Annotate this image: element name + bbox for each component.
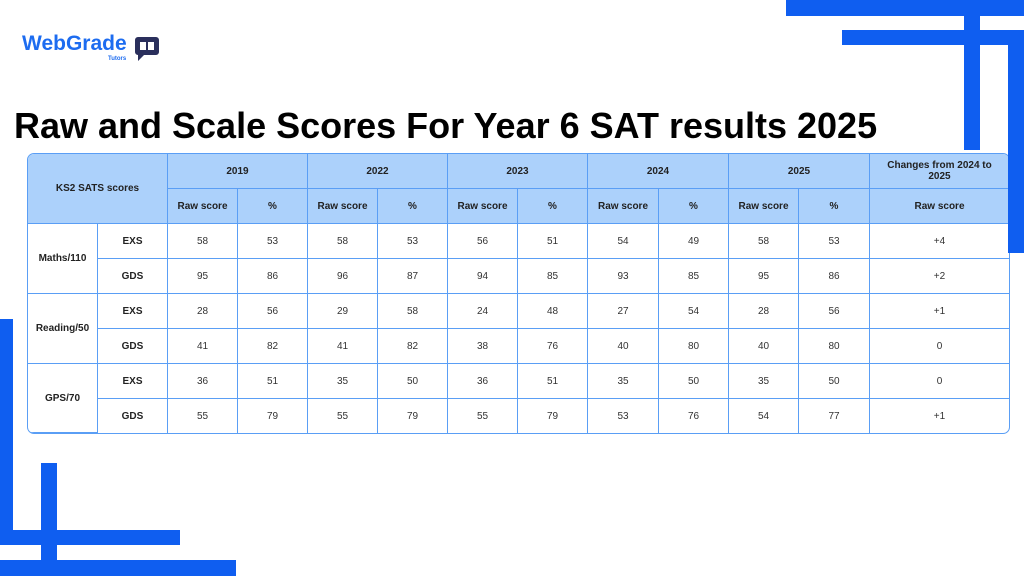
table: scores: 2023 (506, 166, 529, 176)
table: scores: 56 (267, 306, 278, 316)
table: scores: +4 (934, 236, 945, 246)
table: scores: 2024 (647, 166, 669, 176)
table: scores: GDS (122, 340, 143, 352)
table: scores: 51 (547, 376, 558, 386)
table: scores: Reading/50 (36, 323, 89, 334)
table: scores: 56 (828, 306, 840, 316)
table: scores: Raw score (177, 200, 228, 212)
table: scores: 2025 (928, 171, 951, 182)
table: scores: Changes from 2024 to (887, 160, 992, 171)
table: scores: GPS/70 (45, 392, 80, 404)
table: scores: 0 (937, 340, 942, 352)
table: scores: 28 (197, 306, 208, 316)
table: scores: 56 (477, 236, 488, 246)
table: scores: 96 (337, 270, 348, 282)
table: scores: 2019 (226, 166, 249, 176)
table: scores: 58 (337, 236, 348, 246)
table: scores: 95 (197, 270, 208, 282)
table: scores: 76 (547, 340, 558, 352)
table: scores: Raw score (914, 200, 965, 212)
logo: Tutors (108, 56, 126, 62)
table: scores: 82 (407, 340, 418, 352)
table: scores: 27 (617, 306, 629, 316)
table: scores: 58 (407, 306, 418, 316)
table: scores: 53 (617, 410, 629, 422)
decorative bar right vertical (1008, 30, 1024, 253)
table: scores: 77 (828, 410, 840, 422)
table: scores: 87 (407, 270, 418, 282)
table: scores: 0 (937, 376, 942, 386)
table: scores: 2022 (366, 166, 389, 176)
table: scores: % (830, 200, 838, 212)
table: scores: 50 (407, 376, 418, 386)
table: scores: Raw score (598, 200, 648, 212)
table: scores: 54 (617, 236, 629, 246)
table: scores: 76 (688, 410, 699, 422)
table: scores: 85 (688, 270, 699, 282)
table: scores: 29 (337, 306, 348, 316)
table: scores: 86 (267, 270, 278, 282)
table: scores: 51 (267, 376, 278, 386)
table: scores: Raw score (738, 200, 789, 212)
table: scores: +2 (934, 270, 945, 282)
table: scores: EXS (122, 236, 142, 246)
table: scores: 53 (407, 236, 418, 246)
table: scores: 93 (617, 270, 629, 282)
table: scores: 36 (477, 376, 488, 386)
table: scores: 50 (688, 376, 699, 386)
table: scores: Raw score (457, 200, 508, 212)
table: scores: 82 (267, 340, 278, 352)
table: scores: 85 (547, 270, 558, 282)
table: scores: 40 (758, 340, 769, 352)
table: scores: 55 (337, 410, 348, 422)
table: scores: 48 (547, 306, 558, 316)
table: scores: 55 (477, 410, 488, 422)
table: scores: 49 (688, 236, 699, 246)
table: scores: EXS (122, 376, 142, 386)
table: scores: 58 (758, 236, 769, 246)
table: scores: 80 (688, 340, 699, 352)
table: scores: % (408, 200, 417, 212)
table: scores: 24 (477, 306, 488, 316)
table: scores: 41 (197, 340, 208, 352)
decorative bars top right (786, 0, 1024, 150)
table: scores: GDS (122, 410, 143, 422)
table: scores: 54 (688, 306, 699, 316)
table: scores: 38 (477, 340, 488, 352)
table: scores: % (689, 200, 698, 212)
table: scores: 54 (758, 410, 769, 422)
table: scores: 86 (828, 270, 840, 282)
table: scores: GDS (122, 270, 143, 282)
table: scores: Raw score (317, 200, 368, 212)
table: scores: 55 (197, 410, 208, 422)
table: scores: 94 (477, 270, 488, 282)
table: scores: 28 (758, 306, 769, 316)
table: scores: +1 (934, 410, 945, 422)
table: scores: +1 (934, 306, 945, 316)
table: scores: 35 (337, 376, 348, 386)
table: scores: KS2 SATS scores (56, 183, 139, 194)
table: scores (27, 153, 1010, 434)
logo: WebGrade (22, 32, 127, 55)
table: scores: 95 (758, 270, 769, 282)
table: scores: 51 (547, 236, 558, 246)
table: scores: 79 (407, 410, 418, 422)
table: scores: 40 (617, 340, 629, 352)
table: scores: 2025 (788, 166, 810, 176)
table: scores: 50 (828, 376, 840, 386)
table: scores: Maths/110 (39, 253, 86, 264)
decorative bars bottom left (0, 319, 236, 576)
table: scores: % (268, 200, 277, 212)
table: scores: 79 (267, 410, 278, 422)
table: scores: 53 (267, 236, 278, 246)
logo (22, 32, 159, 62)
table: scores: EXS (122, 306, 142, 316)
table: scores: 35 (758, 376, 769, 386)
table: scores: 79 (547, 410, 558, 422)
table: scores: % (548, 200, 557, 212)
table: scores: 80 (828, 340, 840, 352)
table: scores: 35 (617, 376, 629, 386)
table: scores: 58 (197, 236, 208, 246)
title: Raw and Scale Scores For Year 6 SAT results 2025 (14, 105, 877, 146)
table: scores: 36 (197, 376, 208, 386)
table: scores: 53 (828, 236, 840, 246)
table: scores: 41 (337, 340, 348, 352)
